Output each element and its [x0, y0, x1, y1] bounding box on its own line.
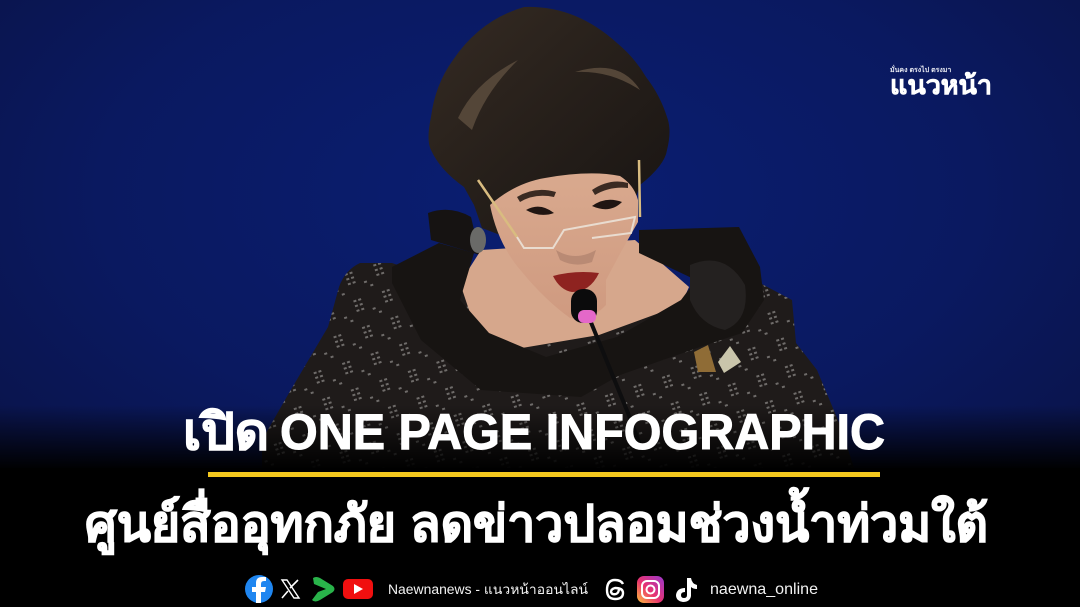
earring: [470, 227, 486, 253]
bottom black fade: [0, 405, 1080, 470]
brooch: [694, 345, 741, 373]
headline line one: ONE PAGE INFOGRAPHIC: [280, 404, 885, 460]
nose shadow: [556, 250, 596, 265]
microphone head: [571, 289, 597, 323]
right brow: [592, 182, 628, 195]
hair highlight: [458, 60, 640, 130]
icon: YouTube: [343, 579, 373, 599]
right eye: [592, 200, 622, 209]
collar highlight: [690, 260, 746, 330]
social media footer: [245, 575, 818, 603]
hair: [428, 7, 670, 235]
headline line one: เปิด: [183, 404, 269, 460]
collar behind neck: [428, 210, 480, 255]
icon: Threads: [607, 580, 623, 599]
microphone pink light: [578, 310, 596, 323]
face: [490, 173, 638, 319]
publisher logo: แนวหน้า: [890, 70, 992, 100]
icon: Instagram: [637, 576, 664, 603]
publisher logo: มั่นคง ตรงไป ตรงมา: [890, 64, 951, 74]
glasses: [478, 160, 640, 248]
handle label: naewna_online: [710, 581, 818, 598]
black satin collar: [392, 227, 764, 397]
yellow divider: [208, 472, 880, 477]
dress with dotted pattern: [262, 263, 858, 480]
icon: X: [282, 580, 299, 598]
bottom black band: [0, 468, 1080, 607]
left brow: [517, 190, 556, 202]
microphone stem: [590, 320, 640, 445]
chest and neck skin: [460, 240, 689, 350]
icon: Facebook: [245, 575, 273, 603]
left eye: [526, 207, 554, 215]
icon: green play logo: [312, 577, 334, 602]
headline line two: ศูนย์สื่ออุทกภัย ลดข่าวปลอมช่วงน้ำท่วมใต้: [85, 487, 988, 555]
page name label: Naewnanews - แนวหน้าออนไลน์: [388, 581, 588, 597]
photo: woman speaking at a microphone: [262, 7, 858, 480]
lips: [553, 272, 599, 292]
icon: TikTok: [676, 578, 697, 602]
